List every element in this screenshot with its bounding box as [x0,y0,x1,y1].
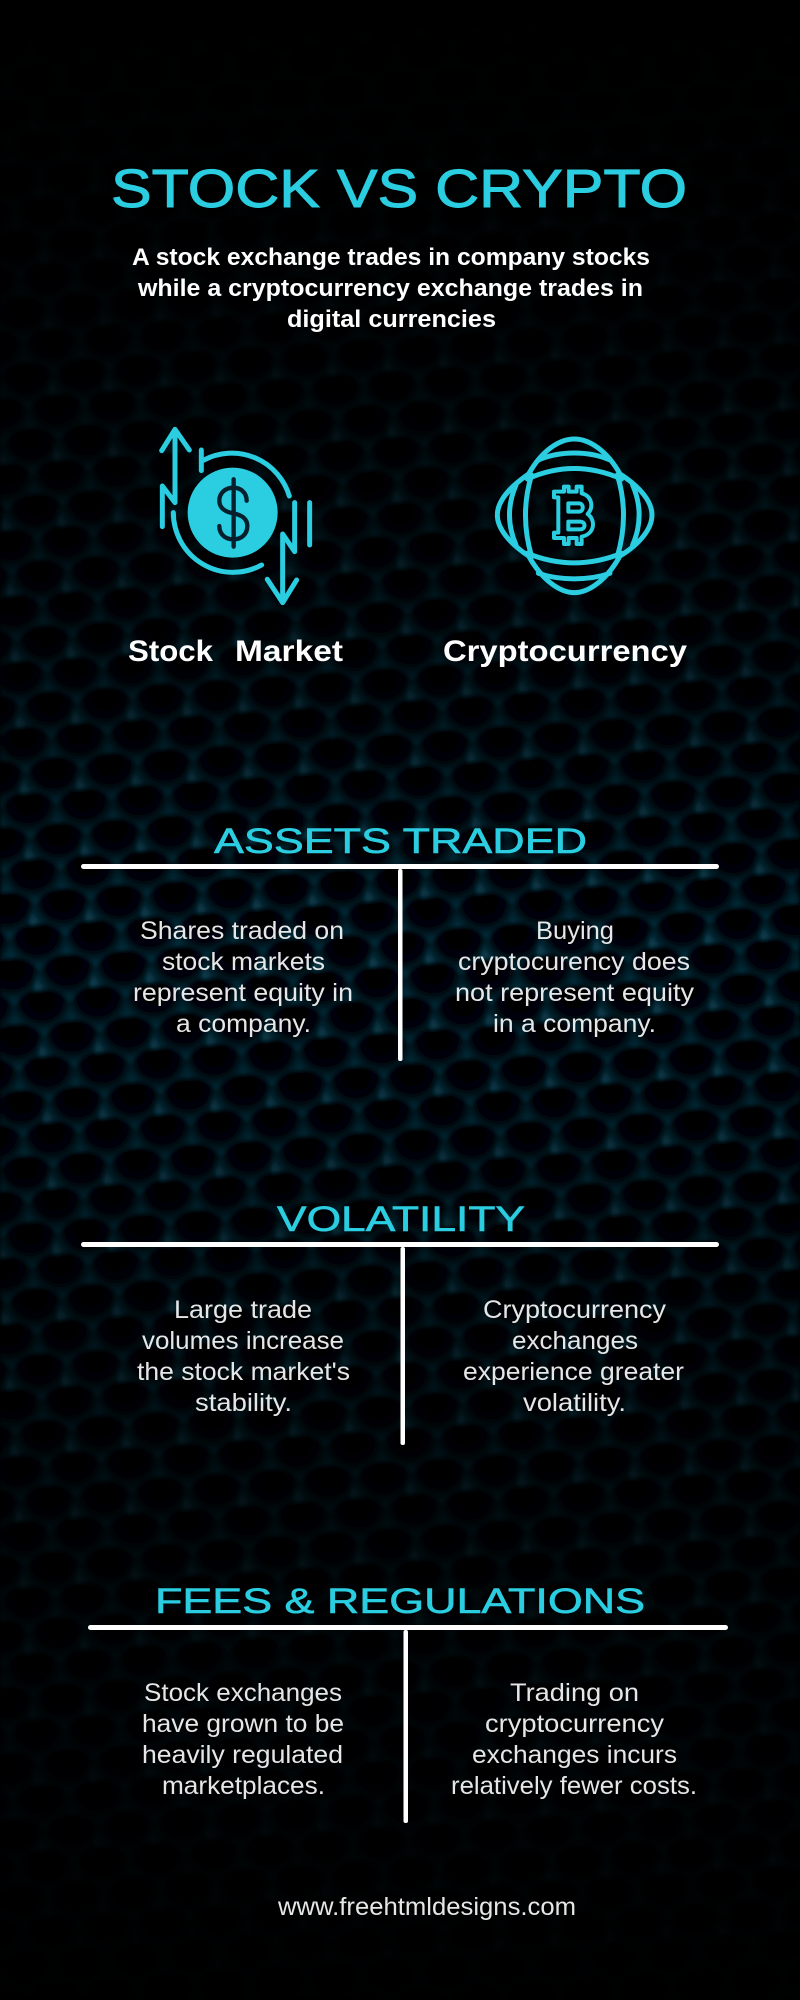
text: crypto volatility [463,1296,684,1417]
text: stock assets: represent equity in [133,979,353,1007]
text: crypto assets: not represent equity [455,979,695,1007]
intro text: digital currencies [287,306,496,333]
text: crypto volatility: exchanges [512,1327,638,1355]
text: crypto volatility: experience greater [463,1358,684,1386]
divider: fees and regulations [88,1625,728,1823]
text: stock assets: stock markets [162,948,325,976]
heading: assets traded: ASSETS TRADED [214,822,587,861]
panel: fees and regulations [88,1582,728,1823]
text: crypto assets [455,917,695,1038]
text: stock assets: a company. [176,1010,311,1038]
text: crypto volatility: Cryptocurrency [483,1296,667,1324]
intro text [132,244,650,333]
label: stock market: Stock [128,635,213,668]
label: stock market [128,635,343,668]
divider: volatility [81,1242,719,1445]
text: stock volatility [137,1296,350,1417]
icon: stock market dollar with arrows [162,429,310,603]
footer website: www.freehtmldesigns.com [277,1893,576,1921]
text: crypto assets: Buying [536,917,614,945]
text: stock volatility: Large trade [174,1296,312,1324]
heading: fees and regulations: FEES & REGULATIONS [155,1582,645,1621]
text: stock assets [133,917,353,1038]
text: stock volatility: volumes increase [142,1327,344,1355]
heading: volatility: VOLATILITY [277,1200,525,1239]
icon: bitcoin globe [497,439,652,593]
text: crypto volatility: volatility. [523,1389,626,1417]
text: crypto fees: cryptocurrency [485,1710,665,1738]
text: crypto assets: in a company. [493,1010,656,1038]
text: crypto fees [451,1679,697,1800]
intro text: while a cryptocurrency exchange trades in [137,275,643,302]
title: STOCK VS CRYPTO [111,159,687,219]
text: stock fees: have grown to be [142,1710,344,1738]
panel: volatility [81,1200,719,1445]
text: stock fees: heavily regulated [142,1741,343,1769]
text: crypto fees: Trading on [510,1679,639,1707]
intro text: A stock exchange trades in company stocks [132,244,650,271]
panel: assets traded [81,822,719,1061]
text: stock fees: Stock exchanges [144,1679,342,1707]
text: stock volatility: stability. [195,1389,292,1417]
text: crypto assets: cryptocurency does [458,948,690,976]
text: crypto fees: relatively fewer costs. [451,1772,697,1800]
label: cryptocurrency: Cryptocurrency [443,635,687,668]
text: stock assets: Shares traded on [140,917,344,945]
label: stock market: Market [235,635,343,668]
text: stock volatility: the stock market's [137,1358,350,1386]
divider: assets traded [81,864,719,1061]
text: stock fees: marketplaces. [162,1772,325,1800]
text: crypto fees: exchanges incurs [472,1741,677,1769]
text: stock fees [142,1679,344,1800]
